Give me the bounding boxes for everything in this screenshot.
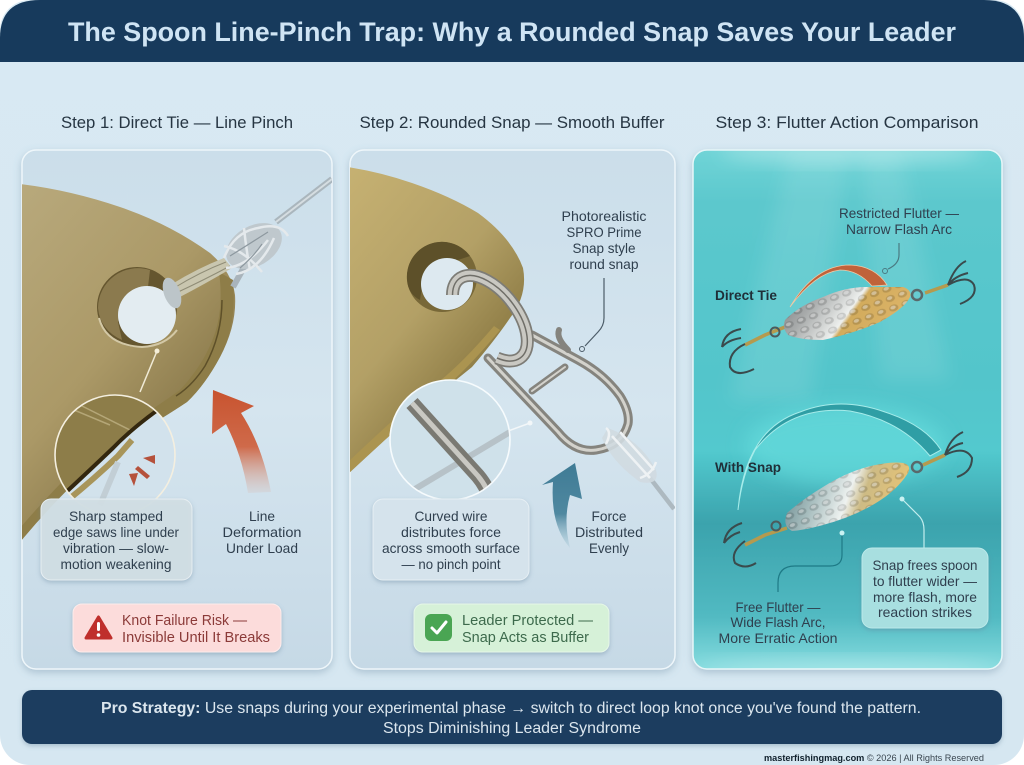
magnifier inset: sharp edge — [54, 394, 176, 498]
pro strategy bar: Stops Diminishing Leader Syndrome — [383, 720, 641, 737]
callout: curved wire text: — no pinch point — [402, 556, 501, 572]
leader: restricted flutter — [888, 243, 899, 269]
alert: knot failure risk: Knot Failure Risk — — [122, 612, 247, 629]
leader line to inset — [140, 351, 157, 392]
callout: snap frees spoon: to flutter wider — — [873, 573, 977, 589]
icon: warning triangle — [86, 617, 111, 638]
callout: sharp edge text: vibration — slow- — [63, 540, 169, 556]
label: with snap: With Snap — [715, 460, 781, 475]
water surface shimmer — [722, 150, 978, 172]
split ring — [452, 275, 527, 361]
panel: step 2 rounded snap — [348, 150, 675, 669]
leader: snap callout — [585, 278, 604, 346]
spoon edge with hole — [20, 184, 235, 542]
label: line deformation: Line — [249, 508, 275, 524]
callout: curved wire text: across smooth surface — [382, 540, 520, 556]
callout: snap frees spoon: more flash, more — [873, 589, 977, 605]
label: free flutter: Wide Flash Arc, — [730, 614, 826, 630]
spoon edge with hole — [348, 167, 524, 474]
marker dot — [528, 420, 532, 426]
heading: step 1: Step 1: Direct Tie — Line Pinch — [61, 113, 293, 132]
fishing line and knot — [159, 179, 332, 311]
label: force distributed: Evenly — [589, 540, 629, 556]
callout: snap frees spoon: reaction strikes — [878, 604, 972, 620]
pro strategy bar: Pro Strategy: Use snaps during your experimental phase → switch to direct loop knot once you've found the pattern. — [101, 700, 921, 717]
arrow: force distributed — [542, 463, 582, 548]
lure: direct tie — [722, 261, 975, 373]
label: line deformation: Under Load — [226, 540, 298, 556]
arrow: line deformation — [212, 390, 271, 493]
callout: sharp edge text — [41, 499, 192, 580]
heading: step 2: Step 2: Rounded Snap — Smooth Buffer — [360, 113, 665, 132]
marker dot — [840, 530, 844, 536]
badge: leader protected: Leader Protected — — [462, 612, 593, 629]
badge: leader protected — [414, 604, 609, 652]
label: free flutter: Free Flutter — — [736, 599, 820, 615]
label: photorealistic snap: Snap style — [572, 240, 636, 256]
callout: curved wire text: distributes force — [401, 524, 501, 540]
callout: sharp edge text: edge saws line under — [53, 524, 179, 540]
footer credit: masterfishingmag.com © 2026 | All Rights Reserved — [764, 753, 984, 764]
arc: free flutter — [738, 404, 941, 510]
magnifier inset: curved wire — [390, 380, 510, 500]
label: free flutter — [718, 599, 838, 646]
marker dot — [900, 496, 904, 502]
alert: knot failure risk — [73, 604, 281, 652]
badge: leader protected: Snap Acts as Buffer — [462, 629, 589, 646]
bottom shimmer — [710, 652, 990, 668]
arc: restricted flutter — [790, 265, 887, 307]
label: restricted flutter: Restricted Flutter — — [839, 205, 959, 221]
leader: free flutter — [778, 533, 842, 592]
callout: curved wire text: Curved wire — [414, 508, 488, 524]
snap wire — [488, 330, 628, 450]
label: free flutter: More Erratic Action — [718, 630, 838, 646]
title: The Spoon Line-Pinch Trap: Why a Rounded Snap Saves Your Leader — [68, 17, 956, 47]
light rays — [730, 150, 950, 400]
label: photorealistic snap: Photorealistic — [562, 208, 646, 224]
marker ring — [882, 268, 888, 274]
label: direct tie: Direct Tie — [715, 288, 777, 303]
label: restricted flutter — [839, 205, 959, 237]
icon: green check — [425, 614, 452, 641]
label: photorealistic snap: SPRO Prime — [566, 224, 642, 240]
lower glow — [745, 405, 945, 485]
pinch arrows — [129, 455, 155, 486]
label: line deformation — [222, 508, 302, 556]
heading: step 3: Step 3: Flutter Action Comparison — [716, 113, 978, 132]
marker dot — [154, 348, 160, 354]
marker ring — [580, 346, 584, 352]
leader line to inset — [510, 423, 528, 431]
panel: step 1 direct tie — [20, 150, 332, 669]
callout: curved wire text — [373, 499, 529, 580]
pro strategy bar — [22, 690, 1002, 744]
label: line deformation: Deformation — [222, 524, 302, 540]
loop knot and line — [602, 428, 674, 509]
panel: step 3 flutter comparison — [693, 140, 1002, 678]
callout: sharp edge text: Sharp stamped — [69, 508, 163, 524]
label: photorealistic snap: round snap — [570, 256, 639, 272]
leader: snap frees spoon — [902, 499, 924, 548]
label: photorealistic snap — [562, 208, 646, 272]
callout: snap frees spoon — [862, 548, 988, 628]
title banner — [0, 0, 1024, 62]
label: force distributed: Force — [592, 508, 627, 524]
label: force distributed — [575, 508, 643, 556]
callout: snap frees spoon: Snap frees spoon — [872, 557, 978, 573]
label: force distributed: Distributed — [575, 524, 643, 540]
label: restricted flutter: Narrow Flash Arc — [846, 221, 952, 237]
lure: with snap — [724, 432, 972, 566]
alert: knot failure risk: Invisible Until It Breaks — [122, 629, 270, 646]
callout: sharp edge text: motion weakening — [60, 556, 172, 572]
